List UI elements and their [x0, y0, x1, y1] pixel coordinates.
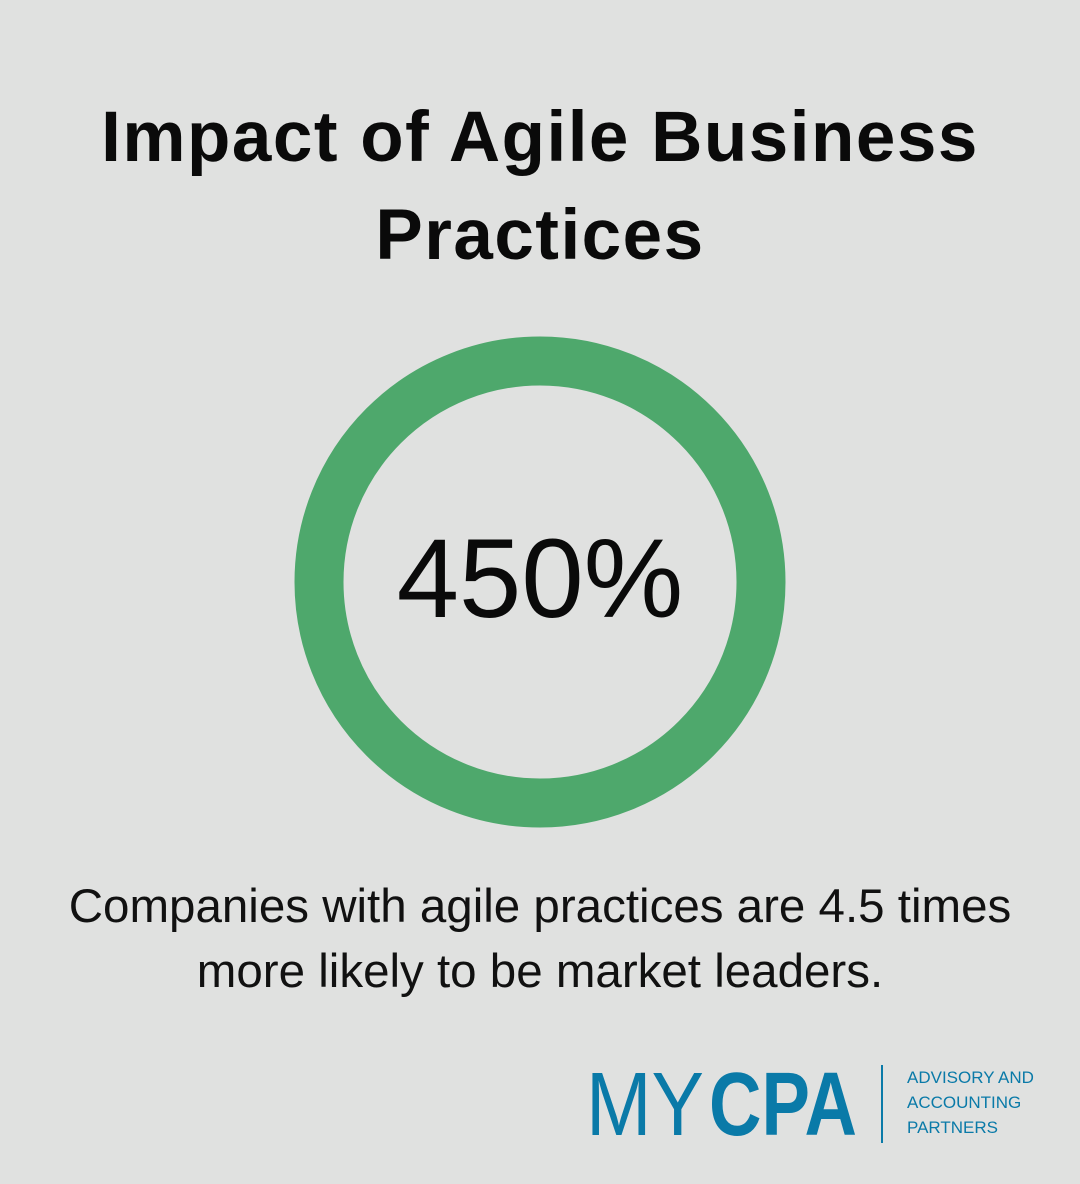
tagline: ADVISORY AND: [907, 1068, 1034, 1087]
ring: [319, 361, 761, 803]
title: [101, 98, 979, 275]
tagline: [907, 1068, 1034, 1137]
logo wordmark: [586, 1055, 857, 1155]
title: Impact of Agile Business: [101, 98, 979, 177]
divider: [881, 1065, 883, 1143]
title: Practices: [375, 196, 705, 275]
stat value: 450%: [397, 516, 683, 641]
caption: more likely to be market leaders.: [197, 945, 883, 998]
logo: [586, 1055, 1034, 1155]
tagline: PARTNERS: [907, 1118, 998, 1137]
logo wordmark: MY: [586, 1055, 704, 1155]
logo wordmark: CPA: [709, 1055, 857, 1155]
tagline: ACCOUNTING: [907, 1093, 1021, 1112]
caption: Companies with agile practices are 4.5 times: [69, 880, 1011, 933]
caption: [69, 880, 1011, 998]
